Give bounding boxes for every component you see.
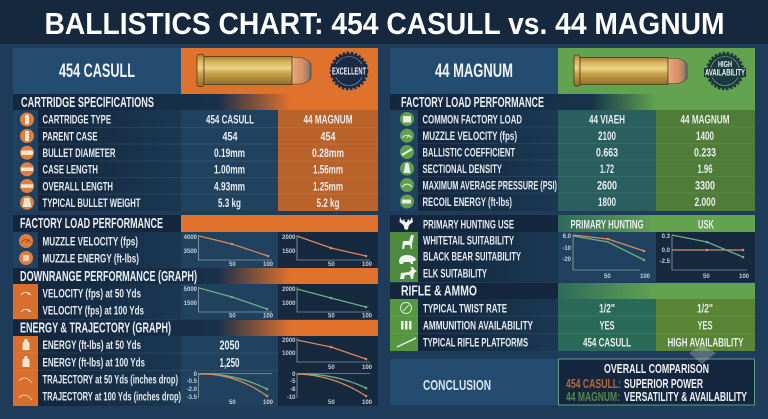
column: rifle values left: YES [600,318,614,332]
column: 454 Casull values: 5.3 kg [218,196,241,210]
icons: load rows [400,112,414,208]
energy values: 2050 [220,338,240,352]
line chart: muzzle 454: 4000 [184,235,198,241]
column: 44 Magnum values: 1.25mm [313,179,343,193]
line chart: hunting right: 0.3 [662,234,671,240]
line chart: muzzle 44: 50 [328,262,335,268]
column: rifle values right [668,301,744,349]
icon: 44 Magnum cartridge [574,55,687,86]
line chart: downrange 454: 5000 [184,287,198,293]
badge: excellent: EXCELLENT [332,66,366,78]
row labels: MUZZLE VELOCITY (fps) [422,129,517,143]
row labels: MAXIMUM AVERAGE PRESSURE (PSI) [422,178,557,192]
column: 44 Magnum values: 0.28mm [312,146,344,160]
trajectory chart: right: -10 [287,395,296,401]
labels: ENERGY (ft-lbs) at 100 Yds [42,355,145,369]
line chart: downrange 44: 100 [362,314,373,320]
trajectory chart: left [187,372,274,406]
trajectory chart: left: -3.5 [187,395,198,401]
header values: PRIMARY HUNTING [570,217,644,231]
row labels: PARENT CASE [42,129,98,143]
section bar: factory load performance left: FACTORY LOAD PERFORMANCE [20,215,163,232]
column: first load values [589,112,625,209]
section bar: factory load performance right: FACTORY LOAD PERFORMANCE [401,94,544,111]
panel: factory load rows [13,232,378,268]
heading: 44 Magnum: 44 MAGNUM [435,61,513,82]
column: 44 Magnum values: 454 [320,129,336,143]
labels: MUZZLE VELOCITY (fps) [42,234,138,248]
line chart: energy 44: 50 [328,365,335,371]
labels: PRIMARY HUNTING USE [423,217,514,231]
icons: speed gauges [21,292,31,312]
section bar: cartridge specifications [13,94,378,111]
line chart: energy 44: 2000 [282,338,296,344]
column: 44 Magnum load values: 2.000 [694,195,716,209]
line chart: energy 44: 1000 [282,351,296,357]
trajectory chart: right: -8 [290,387,296,393]
line chart: hunting right [660,234,750,280]
column: 44 Magnum load values: 3300 [695,178,715,192]
badge: high availability [704,54,746,88]
row labels [42,112,141,210]
line chart: downrange 454: 1500 [184,301,198,307]
trajectory chart: right: 0 [292,372,296,378]
column: first load values: 0.663 [596,145,618,159]
column: 454 Casull values: 1.00mm [214,162,245,176]
labels: VELOCITY (fps) at 100 Yds [42,303,144,317]
line chart: hunting right: 0.0 [662,248,671,254]
line chart: downrange 44: 2000 [282,287,296,293]
line chart: muzzle 44 [282,235,373,268]
line chart: muzzle 44: 100 [362,262,373,268]
section bar: cartridge specifications: CARTRIDGE SPECIFICATIONS [21,94,154,111]
icons: animals [399,217,417,279]
labels [423,217,521,280]
column: first load values: 44 VIAEH [589,112,625,126]
heading: conclusion: CONCLUSION [423,377,491,394]
column: 454 Casull values: 454 CASULL [206,112,254,126]
line chart: downrange 44: 1000 [282,301,296,307]
trajectory chart: right: 50 [328,400,335,406]
column: 44 Magnum load values: 0.233 [694,145,716,159]
row labels: CARTRIDGE TYPE [42,112,111,126]
labels: TRAJECTORY at 50 Yds (inches drop) [42,372,178,386]
panel: 454 Casull header [13,48,378,94]
column: 44 Magnum values: 1.56mm [313,162,343,176]
column: 454 Casull values [206,112,254,210]
line chart: muzzle 44: 1500 [282,249,296,255]
trajectory chart: left: -2.0 [187,387,198,393]
column: rifle values left: 1/2" [599,301,615,315]
callout: overall comparison: 454 CASULL: [566,376,621,391]
line chart: muzzle 44: 2000 [282,235,296,241]
labels: TYPICAL RIFLE PLATFORMS [423,335,528,349]
line chart: hunting left: 50 [604,274,611,280]
line chart: downrange 454: 50 [229,314,236,320]
energy values: 1,250 [220,355,240,370]
line chart: downrange 454: 100 [263,314,274,320]
line chart: muzzle 454: 50 [229,262,236,268]
labels [42,234,139,265]
panel: 44 Magnum header [390,48,755,94]
labels: ELK SUITABILITY [423,266,487,280]
line chart: downrange 454 [184,287,274,320]
trajectory chart: right: 100 [362,400,373,406]
line chart: hunting left: 6.0 [563,234,572,240]
callout: overall comparison: 44 MAGNUM: [566,389,620,404]
labels: TYPICAL TWIST RATE [423,301,507,315]
column: first load values: 2600 [597,178,617,192]
icon: sparkle diamond [689,345,716,364]
section bar: factory load performance left [13,215,378,232]
line chart: hunting right: -2.5 [660,259,671,265]
column: 454 Casull values: 0.19mm [214,146,245,160]
line chart: energy 44 [282,338,373,371]
section bar: energy and trajectory: ENERGY & TRAJECTORY (GRAPH) [20,320,171,336]
line chart: muzzle 454: 3500 [184,249,198,255]
panel: conclusion [390,359,558,405]
trajectory chart: left: 100 [263,400,274,406]
line chart: hunting right: 50 [703,274,710,280]
line chart: energy 44: 100 [362,365,373,371]
table: rifle and ammo [390,299,755,351]
column: 454 Casull values: 4.93mm [214,179,245,193]
panel: hunting use [390,215,755,282]
callout: overall comparison: OVERALL COMPARISON [604,361,709,376]
row labels: BALLISTIC COEFFICIENT [422,145,515,159]
line chart: muzzle 454 [184,235,274,268]
labels [42,286,144,317]
column: rifle values left [583,301,631,349]
icons: cartridge and arc [19,339,32,400]
icons: specification rows [20,112,34,210]
table: factory load performance [390,110,755,211]
column: first load values: 1800 [598,195,616,209]
section bar: downrange performance: DOWNRANGE PERFORMANCE (GRAPH) [20,268,197,285]
section bar: factory load performance right [390,94,755,111]
energy values [220,338,240,370]
line chart: downrange 44 [282,287,373,320]
column: 44 Magnum load values: 44 MAGNUM [680,112,730,126]
column: 44 Magnum values [304,112,352,210]
labels: MUZZLE ENERGY (ft-lbs) [42,251,139,265]
title band [0,0,768,44]
row labels [422,112,557,209]
trajectory chart: right: -5 [290,379,296,385]
row labels: TYPICAL BULLET WEIGHT [42,196,141,210]
section bar: rifle and ammo [390,282,755,300]
labels: TRAJECTORY at 100 Yds (inches drop) [42,389,181,403]
row labels: RECOIL ENERGY (ft-lbs) [422,195,512,209]
callout: overall comparison: SUPERIOR POWER [624,376,703,391]
column: first load values: 1.72 [600,162,614,176]
badge: high availability: AVAILABILITY [705,68,745,78]
trajectory chart: left: -0.5 [187,379,198,385]
callout: overall comparison [558,359,754,405]
row labels: BULLET DIAMETER [42,146,116,160]
row labels: COMMON FACTORY LOAD [422,112,522,126]
labels: ENERGY (ft-lbs) at 50 Yds [42,338,141,352]
row labels: SECTIONAL DENSITY [422,162,502,176]
header values: USK [698,217,714,231]
column: 44 Magnum values: 5.2 kg [316,196,340,210]
row labels: OVERALL LENGTH [42,179,113,193]
trajectory chart: left: 0 [194,372,198,378]
badge: excellent [331,54,367,88]
line chart: muzzle 454: 100 [263,262,274,268]
badge: high availability: HIGH [718,59,732,69]
line chart: hunting left: -20 [562,257,572,263]
line chart: hunting left: 100 [640,274,651,280]
labels: AMMUNITION AVAILABILITY [423,318,533,332]
labels [423,301,533,349]
section bar: energy and trajectory [13,320,378,336]
row labels: CASE LENGTH [42,162,98,176]
line chart: hunting right: 100 [739,274,750,280]
column: rifle values right: YES [698,318,712,332]
panel: downrange rows [13,284,378,320]
table: cartridge specifications [13,110,378,211]
labels: WHITETAIL SUITABILITY [423,233,514,247]
line chart: downrange 44: 50 [328,314,335,320]
panel: energy and trajectory rows [13,336,378,406]
column: rifle values right: 1/2" [697,301,713,315]
section bar: rifle and ammo: RIFLE & AMMO [401,282,477,300]
labels: BLACK BEAR SUITABILITY [423,249,521,263]
trajectory chart: left: 50 [229,400,236,406]
line chart: hunting left: -10 [562,246,572,252]
column: 44 Magnum load values: 1.96 [698,162,713,176]
column: 44 Magnum load values: 1400 [696,129,714,143]
icon: 454 Casull cartridge [197,54,311,86]
trajectory chart: right [287,372,373,406]
line chart: hunting left [562,234,651,280]
column: 44 Magnum load values [680,112,730,209]
column: 44 Magnum values: 44 MAGNUM [304,112,352,126]
icons: twist, ammo, rifle [397,302,416,347]
labels: VELOCITY (fps) at 50 Yds [42,286,141,300]
icons: gauge and energy [19,234,33,265]
column: first load values: 2100 [598,129,616,143]
column: 454 Casull values: 454 [222,129,238,143]
labels [42,338,181,403]
column: rifle values left: 454 CASULL [583,335,631,349]
heading: 454 Casull: 454 CASULL [59,61,135,82]
